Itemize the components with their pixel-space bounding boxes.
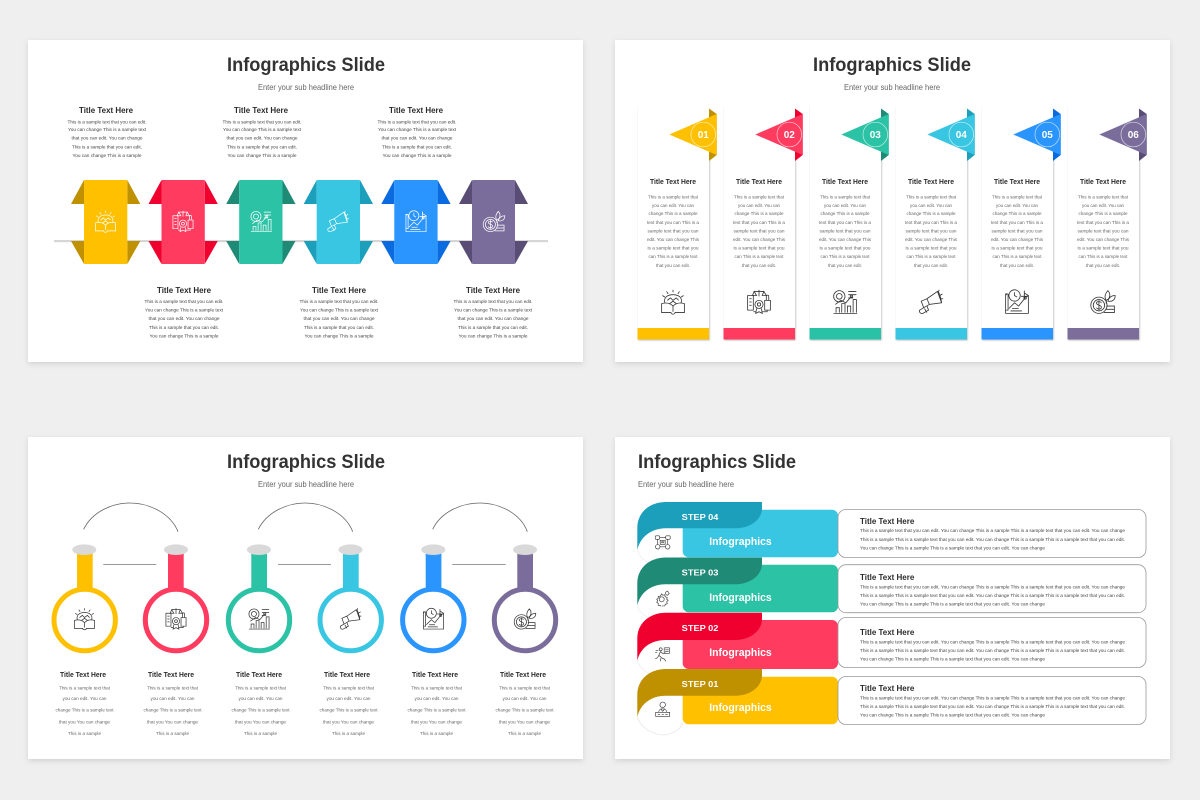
column 04: sample text that you can (906, 228, 957, 234)
text block: top 1 (68, 106, 147, 159)
text block: top 2: You can change This is a sample (228, 153, 297, 159)
step 02: STEP 02 (682, 623, 719, 633)
flask blue (403, 544, 464, 651)
column 04 (895, 106, 975, 340)
text box: step 01: You can change This is a sample This is a sample text that you can edit. You can change (860, 713, 1045, 719)
panel: circle flasks slide (28, 437, 583, 759)
step 03: Infographics (709, 592, 772, 604)
text block: flask 3: change This is a sample text (232, 708, 290, 714)
text block: flask 4: Title Text Here (324, 670, 370, 679)
subheading: ribbon slide: Enter your sub headline here (258, 82, 354, 92)
step 04: Infographics (709, 536, 772, 548)
text block: flask 2: This is a sample text that (147, 686, 199, 692)
text block: flask 3: Title Text Here (236, 670, 282, 679)
column 06: Title Text Here (1080, 177, 1126, 186)
text block: top 2 (222, 106, 302, 159)
column 03: you can edit. You can (824, 203, 866, 209)
text box: step 02 (838, 618, 1146, 668)
column 03: Title Text Here (822, 177, 868, 186)
text box: step 02: This is a sample This is a sample text that you can edit. You can change This is a sample This is a sample text that you can edit. (860, 648, 1125, 654)
text block: top 3: You can change This is a sample (382, 153, 452, 159)
text block: flask 4: that you You can change (323, 719, 374, 725)
column 05: is a sample text that you (992, 246, 1043, 252)
flask purple (494, 544, 556, 651)
column 06: edit. You can change This (1077, 237, 1130, 243)
text block: top 3: that you can edit. You can change (382, 136, 453, 142)
column 05: 05 (1042, 130, 1053, 141)
column 03: sample text that you can (820, 228, 871, 234)
text block: flask 5: This is a sample (420, 731, 453, 737)
text block: flask 5: Title Text Here (412, 670, 458, 679)
column 04: change This is a sample (906, 211, 956, 217)
column 01: sample text that you can (648, 228, 699, 234)
column 04: text that you can This is a (905, 220, 957, 226)
text block: flask 2 (144, 670, 202, 737)
ribbon: teal (226, 180, 296, 264)
ribbon: cyan (304, 180, 373, 264)
text block: bottom 2: that you can edit. You can change (304, 316, 375, 322)
text block: bottom 1: You can change This is a sample text (145, 308, 224, 314)
column 01: you can edit. You can (652, 203, 694, 209)
text box: step 04: Title Text Here (860, 517, 915, 526)
column 02: 02 (784, 130, 795, 141)
column 01: is a sample text that you (648, 246, 699, 252)
column 03: that you can edit. (828, 263, 862, 269)
text block: flask 1: you can edit. You can (62, 696, 107, 702)
column 06: can This is a sample text (1078, 254, 1128, 260)
column 03: edit. You can change This (819, 237, 872, 243)
text block: flask 6: you can edit. You can (502, 696, 547, 702)
text block: top 3 (378, 106, 457, 159)
column 05: you can edit. You can (996, 203, 1038, 209)
text block: flask 6: This is a sample text that (499, 686, 551, 692)
text block: top 1: Title Text Here (79, 106, 133, 115)
flask teal (228, 544, 290, 651)
column 01: that you can edit. (656, 263, 690, 269)
text block: flask 2: This is a sample (156, 731, 189, 737)
text block: bottom 1: This is a sample text that you can edit. (144, 299, 224, 305)
text block: top 2: Title Text Here (234, 106, 288, 115)
text block: flask 3 (232, 670, 290, 737)
column 01: Title Text Here (650, 177, 696, 186)
text block: bottom 1: This is a sample that you can edit. (149, 325, 219, 331)
column 06: 06 (1128, 130, 1139, 141)
text block: flask 3: you can edit. You can (238, 696, 283, 702)
column 02: sample text that you can (734, 228, 785, 234)
step 01: Infographics (709, 702, 772, 714)
column 05: edit. You can change This (991, 237, 1044, 243)
column 04: can This is a sample text (906, 254, 956, 260)
text block: flask 2: Title Text Here (148, 670, 194, 679)
text block: flask 1 (56, 670, 114, 737)
ribbon: blue (381, 180, 451, 264)
text box: step 02: This is a sample text that you can edit. You can change This is a sample This is a sample text that you can edit. You can change (860, 640, 1125, 646)
heading: steps slide title: Infographics Slide (638, 452, 796, 473)
text block: flask 1: This is a sample (68, 731, 101, 737)
text block: bottom 1: Title Text Here (157, 286, 211, 295)
column 03: This is a sample text that (820, 194, 871, 200)
column 04: that you can edit. (914, 263, 948, 269)
text block: flask 5 (408, 670, 466, 737)
step 03: STEP 03 (682, 568, 719, 578)
column 03 (809, 106, 889, 340)
panel: steps slide (615, 437, 1170, 759)
text box: step 04: You can change This is a sample This is a sample text that you can edit. You can change (860, 546, 1045, 552)
text block: bottom 3 (454, 286, 533, 340)
text block: top 3: You can change This is a sample text (378, 127, 457, 133)
column 04: you can edit. You can (910, 203, 952, 209)
subheading: flag slide: Enter your sub headline here (844, 82, 940, 92)
column 01: This is a sample text that (648, 194, 699, 200)
text block: flask 1: change This is a sample text (56, 708, 114, 714)
column 02: is a sample text that you (734, 246, 785, 252)
text block: flask 1: that you You can change (59, 719, 110, 725)
text block: bottom 2: You can change This is a sample (304, 334, 374, 340)
step 02 (637, 613, 838, 677)
text block: top 2: This is a sample text that you can edit. (222, 120, 302, 126)
text block: flask 5: that you You can change (411, 719, 462, 725)
text block: top 2: that you can edit. You can change (226, 136, 298, 142)
text block: top 3: Title Text Here (389, 106, 443, 115)
text box: step 01 (838, 676, 1146, 724)
column 06: change This is a sample (1078, 211, 1128, 217)
text block: flask 2: that you You can change (147, 719, 198, 725)
column 01: can This is a sample text (648, 254, 698, 260)
text block: flask 5: change This is a sample text (408, 708, 466, 714)
step 04 (637, 502, 838, 566)
column 02: you can edit. You can (738, 203, 780, 209)
text block: flask 4: change This is a sample text (320, 708, 378, 714)
text box: step 04: This is a sample This is a sample text that you can edit. You can change This is a sample This is a sample text that you can edit. (860, 537, 1125, 543)
column 02: change This is a sample (734, 211, 784, 217)
column 04: is a sample text that you (906, 246, 957, 252)
flask red (145, 544, 207, 651)
text block: top 1: You can change This is a sample text (68, 127, 147, 133)
column 06: that you can edit. (1086, 263, 1120, 269)
column 03: is a sample text that you (820, 246, 871, 252)
column 02: edit. You can change This (733, 237, 786, 243)
text block: flask 6 (496, 670, 554, 737)
text block: top 2: You can change This is a sample text (223, 127, 302, 133)
text box: step 03 (838, 565, 1146, 613)
text block: flask 4 (320, 670, 378, 737)
step 03 (637, 558, 838, 622)
text block: flask 4: This is a sample text that (323, 686, 375, 692)
column 04: This is a sample text that (906, 194, 957, 200)
text block: top 3: This is a sample that you can edit. (382, 144, 452, 150)
column 03: 03 (870, 130, 881, 141)
column 01: text that you can This is a (647, 220, 699, 226)
column 01: edit. You can change This (647, 237, 700, 243)
flask yellow (54, 544, 115, 651)
text block: flask 1: This is a sample text that (59, 686, 111, 692)
column 02: text that you can This is a (733, 220, 785, 226)
text block: flask 4: you can edit. You can (326, 696, 371, 702)
column 05: sample text that you can (992, 228, 1043, 234)
column 01 (637, 106, 717, 340)
heading: flask slide title: Infographics Slide (227, 452, 385, 473)
text block: bottom 3: Title Text Here (466, 286, 520, 295)
heading: ribbon slide title: Infographics Slide (227, 55, 385, 76)
connector lines (103, 564, 506, 566)
column 06: This is a sample text that (1078, 194, 1129, 200)
subheading: flask slide: Enter your sub headline here (258, 479, 354, 489)
text block: bottom 2: You can change This is a sample text (300, 308, 379, 314)
column 05: change This is a sample (992, 211, 1042, 217)
text block: bottom 1 (144, 286, 224, 340)
text block: bottom 1: that you can edit. You can change (148, 316, 220, 322)
text block: flask 6: change This is a sample text (496, 708, 554, 714)
text box: step 01: This is a sample text that you can edit. You can change This is a sample This is a sample text that you can edit. You can change (860, 696, 1125, 702)
column 05: This is a sample text that (992, 194, 1043, 200)
text block: flask 5: This is a sample text that (411, 686, 463, 692)
text box: step 04: This is a sample text that you can edit. You can change This is a sample This is a sample text that you can edit. You can change (860, 528, 1125, 534)
column 03: change This is a sample (820, 211, 870, 217)
text block: top 1: You can change This is a sample (72, 153, 142, 159)
column 01: 01 (698, 130, 709, 141)
text block: flask 2: change This is a sample text (144, 708, 202, 714)
text block: bottom 2: This is a sample text that you can edit. (300, 299, 378, 305)
column 06: you can edit. You can (1082, 203, 1124, 209)
text box: step 03: This is a sample text that you can edit. You can change This is a sample This is a sample text that you can edit. You can change (860, 584, 1125, 590)
column 02: can This is a sample text (734, 254, 784, 260)
text box: step 04 (838, 510, 1146, 558)
column 06 (1067, 106, 1147, 340)
text block: bottom 2 (300, 286, 379, 340)
text block: bottom 1: You can change This is a sample (150, 334, 219, 340)
text block: top 1: that you can edit. You can change (72, 136, 143, 142)
column 02: Title Text Here (736, 177, 782, 186)
text block: bottom 3: This is a sample text that you can edit. (454, 299, 532, 305)
column 03: text that you can This is a (819, 220, 871, 226)
text block: flask 3: that you You can change (235, 719, 286, 725)
column 05: Title Text Here (994, 177, 1040, 186)
column 06: is a sample text that you (1078, 246, 1129, 252)
text block: top 1: This is a sample that you can edit. (72, 144, 142, 150)
column 04: 04 (956, 130, 967, 141)
text block: bottom 2: Title Text Here (312, 286, 366, 295)
text block: flask 1: Title Text Here (60, 670, 106, 679)
ribbon: yellow (71, 180, 140, 264)
step 01 (637, 669, 838, 735)
column 06: sample text that you can (1078, 228, 1129, 234)
column 02: that you can edit. (742, 263, 776, 269)
text box: step 03: This is a sample This is a sample text that you can edit. You can change This is a sample This is a sample text that you can edit. (860, 593, 1125, 599)
text block: flask 3: This is a sample (244, 731, 277, 737)
text block: flask 6: This is a sample (508, 731, 541, 737)
text box: step 02: You can change This is a sample This is a sample text that you can edit. You can change (860, 657, 1045, 663)
text box: step 01: Title Text Here (860, 684, 915, 693)
text block: bottom 3: This is a sample that you can edit. (458, 325, 528, 331)
text block: flask 5: you can edit. You can (414, 696, 459, 702)
text box: step 03: Title Text Here (860, 573, 915, 582)
text box: step 03: You can change This is a sample This is a sample text that you can edit. You can change (860, 602, 1045, 608)
column 05: text that you can This is a (991, 220, 1043, 226)
subheading: steps slide: Enter your sub headline here (638, 479, 734, 489)
flask cyan (320, 544, 381, 651)
column 05: can This is a sample text (992, 254, 1042, 260)
column 02: This is a sample text that (734, 194, 785, 200)
ribbon: red (148, 180, 218, 264)
text block: top 2: This is a sample that you can edit. (227, 144, 297, 150)
step 04: STEP 04 (682, 512, 719, 522)
text box: step 01: This is a sample This is a sample text that you can edit. You can change This is a sample This is a sample text that you can edit. (860, 704, 1125, 710)
text block: flask 4: This is a sample (332, 731, 365, 737)
column 05 (981, 106, 1061, 340)
text block: bottom 3: that you can edit. You can change (458, 316, 529, 322)
text block: flask 6: that you You can change (499, 719, 550, 725)
column 05: that you can edit. (1000, 263, 1034, 269)
column 01: change This is a sample (648, 211, 698, 217)
text block: flask 3: This is a sample text that (235, 686, 287, 692)
ribbon: purple (459, 180, 528, 264)
column 06: text that you can This is a (1077, 220, 1129, 226)
panel: ribbon timeline slide (28, 40, 583, 362)
step 02: Infographics (709, 647, 772, 659)
text block: bottom 2: This is a sample that you can edit. (304, 325, 374, 331)
connector arcs (84, 503, 527, 532)
column 04: Title Text Here (908, 177, 954, 186)
step 01: STEP 01 (682, 679, 719, 689)
column 02 (723, 106, 803, 340)
column 04: edit. You can change This (905, 237, 958, 243)
heading: flag slide title: Infographics Slide (813, 55, 971, 76)
panel: flag columns slide (615, 40, 1170, 362)
text box: step 02: Title Text Here (860, 628, 915, 637)
text block: top 1: This is a sample text that you can edit. (68, 120, 146, 126)
text block: flask 2: you can edit. You can (150, 696, 195, 702)
text block: flask 6: Title Text Here (500, 670, 546, 679)
text block: top 3: This is a sample text that you can edit. (378, 120, 456, 126)
column 03: can This is a sample text (820, 254, 870, 260)
text block: bottom 3: You can change This is a sample text (454, 308, 533, 314)
text block: bottom 3: You can change This is a sample (458, 334, 528, 340)
